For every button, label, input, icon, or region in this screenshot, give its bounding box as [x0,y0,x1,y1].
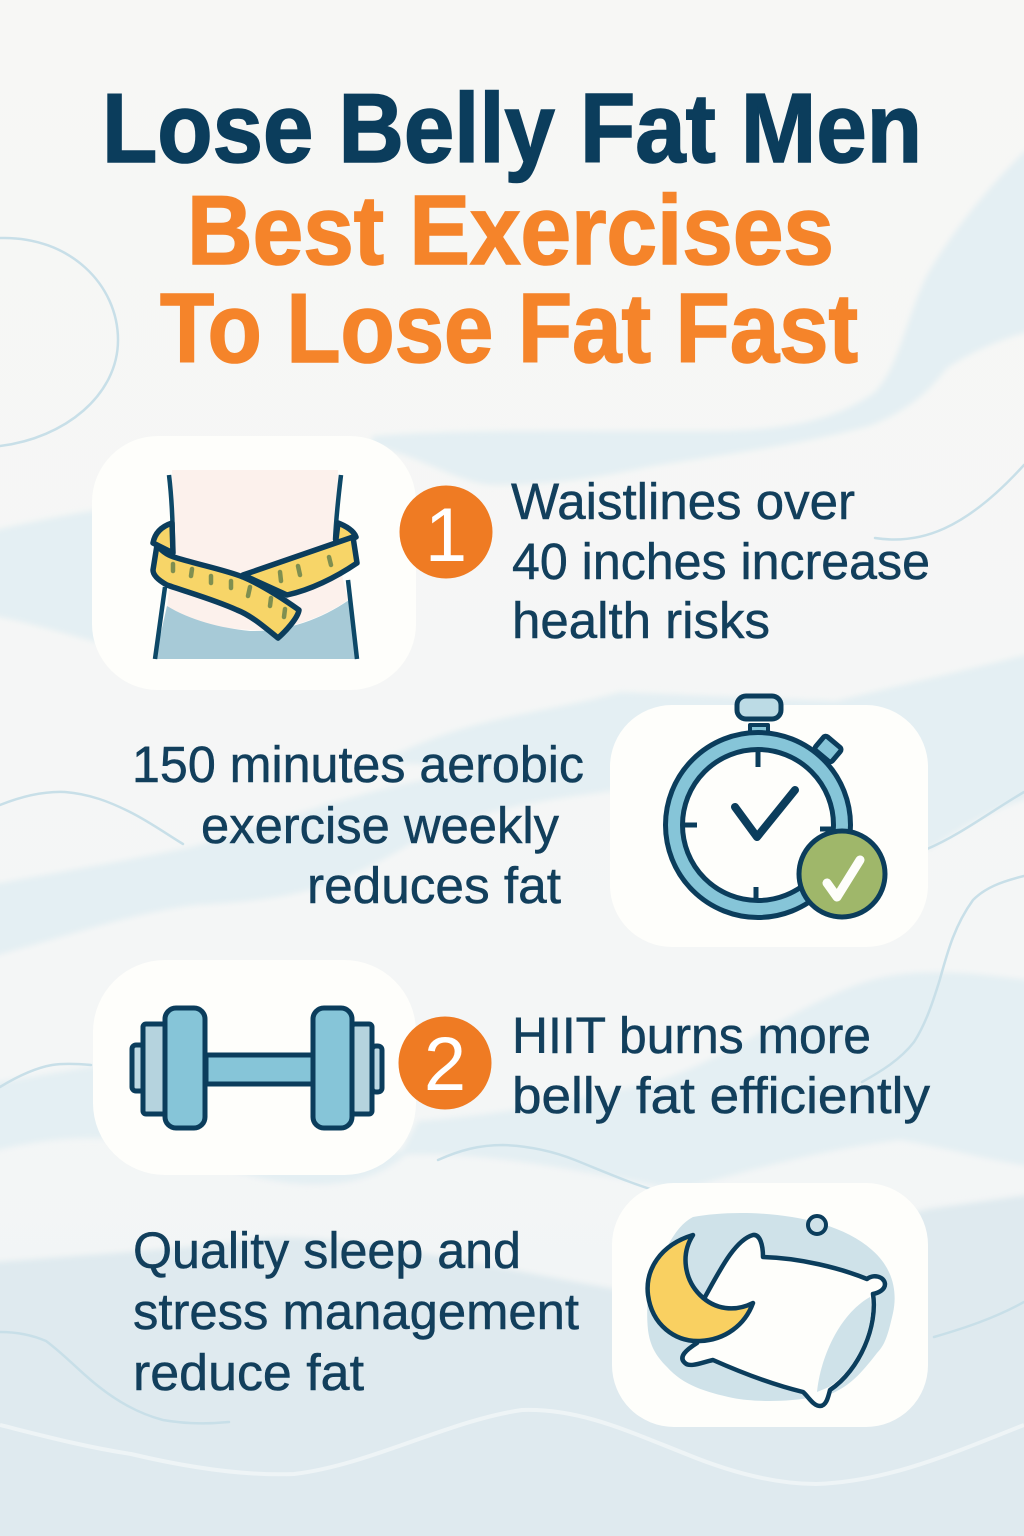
text: aerobic [132,736,584,914]
text: waistlines: health risks [512,592,770,649]
text: waistlines [511,473,930,649]
white wave in footer [0,1410,1024,1484]
icon: stopwatch with check [666,696,885,918]
icon: dumbbell [132,1008,382,1128]
text: sleep: Quality sleep and [133,1222,521,1279]
text: sleep: reduce fat [133,1344,364,1401]
text: waistlines: 40 inches increase [512,533,930,590]
title: To Lose Fat Fast [160,273,858,383]
text: HIIT [512,1007,931,1124]
icon card: pillow [612,1183,928,1427]
text: aerobic: exercise weekly [201,797,559,854]
badge: number 2: 2 [424,1022,466,1107]
title: Best Exercises [187,175,834,285]
badge: number 2 [398,1016,492,1110]
panel: waistline [92,436,930,690]
icon card: waist [92,436,416,690]
title: Lose Belly Fat Men [102,73,922,183]
title [102,73,922,383]
icon: moon and pillow [647,1213,895,1406]
text: aerobic: reduces fat [307,857,561,914]
badge: number 1: 1 [425,493,467,578]
badge: number 1 [400,486,492,578]
panel: HIIT [93,960,931,1175]
text: HIIT: HIIT burns more [512,1007,871,1064]
text: aerobic: 150 minutes aerobic [132,736,584,793]
icon: measuring tape around waist [153,470,357,659]
text: sleep: stress management [133,1283,579,1340]
text: HIIT: belly fat efficiently [512,1067,931,1124]
icon card: stopwatch [610,705,928,947]
text: waistlines: Waistlines over [511,473,855,530]
text: sleep [133,1222,579,1401]
icon card: dumbbell [93,960,416,1175]
panel: aerobic exercise [132,696,928,947]
panel: sleep [133,1183,928,1427]
